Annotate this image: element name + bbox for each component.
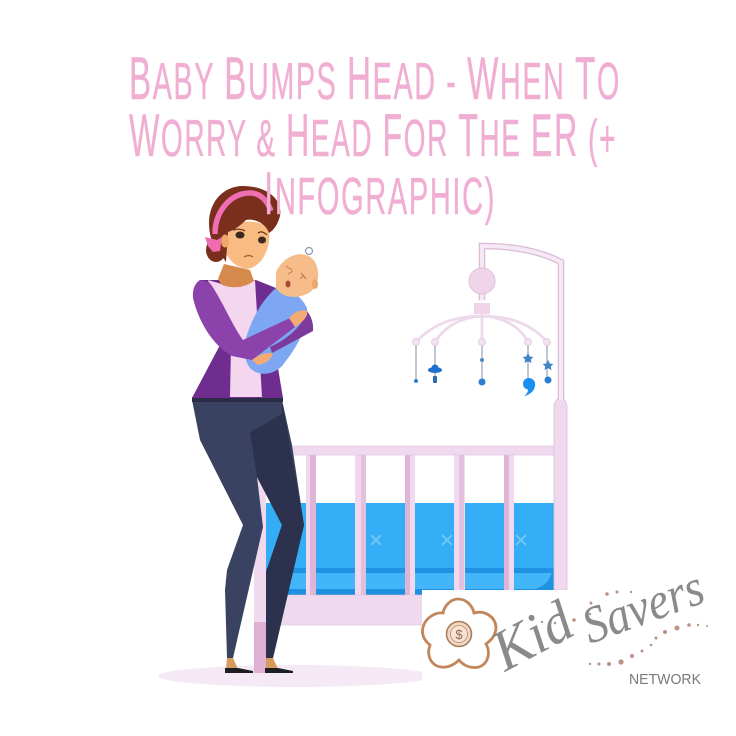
- logo coin: $: [455, 627, 463, 642]
- woman ear: [221, 234, 229, 248]
- logo flower: [422, 599, 496, 668]
- logo wordmark Savers: Savers: [575, 559, 712, 655]
- crib bottom rail: [266, 595, 433, 625]
- logo coin: [446, 622, 472, 646]
- mobile: [412, 246, 561, 400]
- woman shoes: [225, 668, 293, 673]
- logo panel: [422, 559, 720, 688]
- title line 1: BABY BUMPS HEAD - WHEN TO: [129, 45, 621, 112]
- baby face: [286, 266, 306, 288]
- title line 2: WORRY & HEAD FOR THE ER (+: [129, 102, 617, 169]
- mobile branches: [416, 314, 547, 342]
- mobile hub: [474, 303, 490, 314]
- woman legs: [192, 397, 304, 658]
- crib top rail: [285, 446, 557, 455]
- woman lower arm: [270, 310, 313, 353]
- baby head: [276, 254, 318, 297]
- floor shadow: [158, 665, 432, 687]
- woman hair bun: [206, 238, 226, 262]
- mobile ball: [469, 268, 495, 294]
- crib right post: [554, 398, 567, 590]
- logo background: [422, 590, 720, 686]
- woman eyes and mouth: [233, 229, 267, 257]
- woman hands: [252, 310, 307, 365]
- woman shirt: [208, 280, 262, 397]
- baby body swaddle: [245, 287, 307, 374]
- mobile strings: [416, 342, 547, 382]
- crib left post: [254, 470, 266, 673]
- mobile knobs: [412, 338, 550, 346]
- logo network label: NETWORK: [629, 672, 701, 688]
- woman hair: [209, 186, 280, 262]
- crib: [254, 398, 567, 673]
- woman face: [224, 222, 269, 269]
- logo wordmark Kid: Kid: [480, 587, 584, 684]
- woman upper arm: [193, 280, 295, 360]
- title: [129, 45, 621, 227]
- mobile toys: [414, 353, 553, 396]
- woman holding baby: [192, 186, 318, 673]
- mattress: [266, 503, 558, 595]
- title line 3: INFOGRAPHIC): [264, 160, 496, 227]
- woman ankles: [226, 658, 278, 669]
- woman cardigan: [192, 280, 283, 398]
- woman neck: [218, 264, 254, 287]
- headband bow: [205, 237, 222, 252]
- crib slats: [306, 455, 514, 597]
- mobile arm: [482, 246, 561, 400]
- woman headband: [215, 193, 271, 234]
- baby curl: [306, 248, 312, 254]
- logo dots: [541, 590, 708, 666]
- baby ear: [312, 279, 318, 289]
